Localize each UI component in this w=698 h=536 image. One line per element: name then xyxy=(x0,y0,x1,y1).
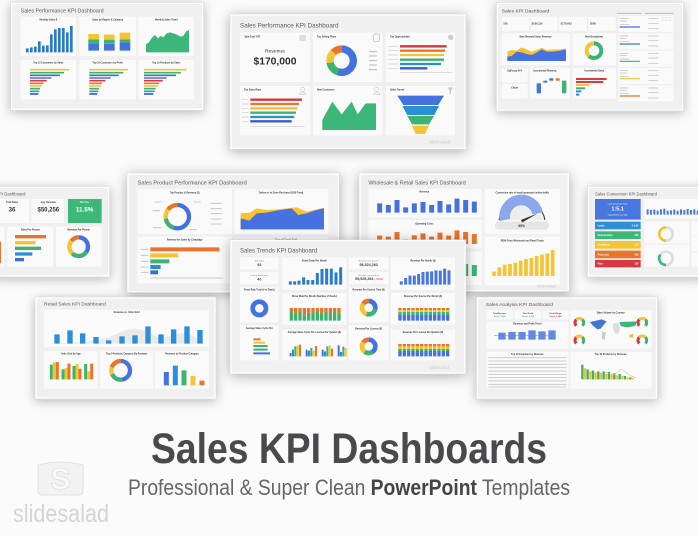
panel: Sales Performance KPI Dashboard (top left): Top 10 Customers by Profit xyxy=(93,62,123,65)
funnel strips: 250 xyxy=(634,245,639,247)
bar chart: leads xyxy=(648,209,698,215)
bar chart: green xyxy=(466,264,474,276)
logo: slidesalad xyxy=(13,462,109,528)
panel: Sales Trends KPI Dashboard xyxy=(230,240,466,374)
panel: Sales Trends KPI Dashboard: Revenue Per Source Total ($) xyxy=(353,289,385,292)
panel: Sales Product Performance KPI Dashboard: Top Product & Revenue ($) xyxy=(170,191,200,194)
gauge ring: yellow xyxy=(659,227,673,241)
funnel strips: Opportunities xyxy=(598,234,614,237)
panel: Sales Analysis KPI Dashboard xyxy=(476,297,658,399)
KPI: revenue: $50,256 xyxy=(38,207,60,213)
panel: Sales Performance KPI Dashboard (top centre): Top Sales Reps xyxy=(244,90,262,92)
panel: Sales Performance KPI Dashboard (top centre): Sales Funnel xyxy=(390,90,405,92)
bar chart: incremental sales xyxy=(576,79,607,95)
bar chart: operating costs xyxy=(380,230,474,244)
heading: slide title: Sales Performance KPI Dashboard xyxy=(240,22,339,29)
footer logo: slidesalad xyxy=(430,365,449,370)
donut chart: revenue per license xyxy=(362,340,375,353)
stacked bars: revenue per license per quarter xyxy=(400,344,448,356)
KPI numbers: 526 xyxy=(503,22,508,26)
panel: Sales KPI Dashboard (top right): OpExsay VoY xyxy=(507,71,523,73)
heading: slide title: Sales Performance KPI Dashboard xyxy=(21,8,104,14)
icon: person xyxy=(374,87,380,95)
KPI tiles: Profit Margin xyxy=(550,312,563,315)
icon: document xyxy=(374,34,379,41)
partial orange bar xyxy=(0,242,1,263)
bar chart: product category xyxy=(166,366,202,385)
panel: Sales Performance KPI Dashboard (top left): Monthly Sales $ xyxy=(40,19,58,22)
panel: Sales Analysis KPI Dashboard: Top 10 Countries by Revenue xyxy=(511,353,544,356)
grouped bars: units by age xyxy=(51,362,92,379)
bar chart: top customers xyxy=(30,70,69,94)
panel: Sales Trends KPI Dashboard: Average Sales Cycle Per xyxy=(246,327,273,330)
bar chart with line xyxy=(494,330,553,340)
panel: Sales KPI Dashboard (top right): Churn xyxy=(511,88,519,90)
panel: KPI Dashboard (left, cropped): Revenue Per Person xyxy=(67,229,91,231)
KPI tiles right: (-56%) xyxy=(374,277,383,281)
panel: Sales Analysis KPI Dashboard: Revenue and Profit Trend xyxy=(513,322,542,325)
stacked bar chart: sales by region xyxy=(94,42,125,51)
area chart: revenue xyxy=(507,47,566,61)
funnel strips xyxy=(595,222,641,267)
stacked bars: show rate per month xyxy=(291,308,339,321)
donut chart: revenue per source xyxy=(362,301,375,314)
funnel strips: 120 xyxy=(634,264,639,266)
KPI tiles left: 40 xyxy=(257,278,261,282)
KPI tiles: Total Profit xyxy=(523,312,533,315)
KPI numbers: $186,126 xyxy=(532,22,543,26)
panel: Sales KPI Dashboard (top right) xyxy=(496,2,684,111)
icon: filter xyxy=(448,87,453,94)
donut chart: show rate xyxy=(253,302,266,315)
funnel chart xyxy=(397,96,444,134)
panel: Retail Sales KPI Dashboard xyxy=(35,297,216,399)
donut chart: top products xyxy=(166,205,189,228)
panel: Sales Performance KPI Dashboard (top left): Monthly Sales Trend xyxy=(155,19,178,22)
bar chart: sales per person xyxy=(15,237,46,260)
waterfall chart xyxy=(537,78,566,93)
bar chart: revenue per month xyxy=(401,269,449,285)
KPI tiles: Total Revenue xyxy=(493,312,507,315)
logo wordmark: slidesalad xyxy=(13,500,109,528)
footer logo: slidesalad xyxy=(536,283,556,288)
bar chart: monthly sales xyxy=(27,26,71,52)
panel: Sales Product Performance KPI Dashboard xyxy=(127,173,339,293)
icon: S box: S xyxy=(50,463,71,496)
text: revenue KPI: Sale Goal YTD xyxy=(244,36,261,38)
KPI: total sales: Total Sales xyxy=(6,201,19,204)
panel: Retail Sales KPI Dashboard: Units Sold by Age xyxy=(61,353,81,356)
panel: Sales Performance KPI Dashboard (top centre): Top Opportunities xyxy=(390,35,411,38)
world map xyxy=(590,319,637,340)
panel: Sales Trends KPI Dashboard: Revenue Per Month ($) xyxy=(410,260,436,263)
heading: slide title: Retail Sales KPI Dashboard xyxy=(44,302,106,308)
heading: slide title: Sales Trends KPI Dashboard xyxy=(240,249,317,255)
KPI: conversion card: Opportunities per Sale xyxy=(608,213,628,216)
panel: Sales Trends KPI Dashboard: Revenue Per Source Per Month ($) xyxy=(404,295,442,298)
KPI numbers: $500 xyxy=(590,22,596,26)
KPI tiles right: Revenue Year To Date xyxy=(359,259,379,262)
funnel strips: Quotations xyxy=(598,244,611,247)
bar chart: sales reps xyxy=(250,100,302,121)
bar chart: top products xyxy=(144,70,187,94)
panel: Sales Product Performance KPI Dashboard: Cost of Goods Sold xyxy=(275,238,297,241)
panel: Wholesale & Retail Sales KPI Dashboard xyxy=(359,173,569,292)
grouped bars: sales cycle per quarter xyxy=(291,345,346,356)
gauge xyxy=(495,200,549,230)
bar chart: yellow growth xyxy=(494,250,553,276)
text: revenue KPI: Revenue xyxy=(265,49,285,55)
donut chart: revenue per person xyxy=(69,237,88,256)
panel: Sales Conversion KPI Dashboard (right, cropped) xyxy=(587,186,698,277)
KPI tiles: Score: 1.24% xyxy=(549,315,562,318)
right column rep bars xyxy=(620,27,640,96)
panel: Sales Trends KPI Dashboard: Show Rate Per Month (Number of Deals) xyxy=(292,295,337,298)
panel: Sales Trends KPI Dashboard: Average Sales Cycle Per License Per Quarter ($) xyxy=(288,331,341,334)
KPI: conversion card: 1:5.1 xyxy=(612,207,624,213)
donut chart: breakdown xyxy=(587,43,601,58)
icon: card xyxy=(299,35,306,41)
KPI tiles right: 98,524,263 xyxy=(359,263,378,267)
panel: Sales Trends KPI Dashboard: Revenue Per License ($) xyxy=(355,328,382,330)
KPI: revenue: Avg. Revenue xyxy=(41,201,57,204)
KPI: conversion card xyxy=(595,199,641,220)
KPI: total sales: 36 xyxy=(8,206,16,213)
heading: slide title: Sales Analysis KPI Dashboard xyxy=(486,302,553,308)
panel: Sales Trends KPI Dashboard: Revenue Per License Per Quarter ($) xyxy=(403,331,443,334)
KPI tiles: Score: 1,356 xyxy=(494,315,506,318)
KPI tiles right: Revenue Last month vs xyxy=(358,274,379,277)
panel: Sales KPI Dashboard (top right): Incremental Sales xyxy=(584,70,605,73)
funnel strips: Leads xyxy=(598,225,605,227)
stacked bars: revenue per source per month xyxy=(400,308,448,321)
heading: slide title: Sales KPI Dashboard xyxy=(502,8,550,14)
panel: Sales Trends KPI Dashboard: Show Deals Per Month xyxy=(302,260,327,263)
panel: Sales KPI Dashboard (top right): Rest Breakdown xyxy=(585,35,604,38)
panel: Sales KPI Dashboard (top right): New Renewal Sales Revenue xyxy=(520,36,552,38)
KPI tiles xyxy=(493,312,563,318)
KPI: green card: Win Rate xyxy=(80,201,90,204)
heading: slide title: Sales Conversion KPI Dashboard xyxy=(595,191,658,196)
gauges xyxy=(573,317,648,346)
panel: Sales Product Performance KPI Dashboard: Revenue for Sales by Campaign xyxy=(167,239,203,241)
icon: person xyxy=(300,87,306,95)
bar chart: revenue xyxy=(380,199,474,213)
panel: Wholesale & Retail Sales KPI Dashboard: ROM From Wholesale and Retail Totals xyxy=(501,239,545,242)
funnel strips: Wins xyxy=(598,264,604,266)
text: revenue KPI: $170,000 xyxy=(253,56,297,67)
area chart: new customers xyxy=(322,102,376,130)
panel: Sales Analysis KPI Dashboard: Top 10 Products by Revenue xyxy=(595,353,627,356)
area chart: monthly trend xyxy=(146,30,189,52)
bar chart: deals per month xyxy=(290,267,341,285)
panel: Sales Performance KPI Dashboard (top centre) xyxy=(230,14,466,149)
title: Sales KPI Dashboards xyxy=(151,425,547,473)
grouped bars with line xyxy=(582,365,636,379)
panel: Retail Sales KPI Dashboard: Top 5 Products Category By Revenue xyxy=(106,353,148,356)
panel: Sales Performance KPI Dashboard (top centre): New Customers xyxy=(317,89,335,92)
gauge ring: green xyxy=(659,252,673,265)
funnel strips: 500 xyxy=(634,235,639,237)
KPI tiles left: Total Sales xyxy=(254,259,264,262)
panel: Sales Performance KPI Dashboard (top left): Top 10 Products by Sales xyxy=(152,62,181,65)
bar chart: opportunities xyxy=(400,46,447,68)
footer logo: slidesalad xyxy=(430,139,451,144)
subtitle: Professional & Super Clean PowerPoint Templates xyxy=(128,475,570,500)
panel: Sales Performance KPI Dashboard (top centre): Top Selling Plans xyxy=(317,36,337,38)
panel: Sales KPI Dashboard (top right): Incremental Revenue xyxy=(533,70,557,73)
panel: Sales Analysis KPI Dashboard: Sales Volume by Country xyxy=(597,312,625,315)
legend: plans xyxy=(369,52,377,70)
panel: Sales Performance KPI Dashboard (top left): Top 10 Customers by Sales xyxy=(33,62,64,65)
legend xyxy=(617,12,673,15)
KPI: green card xyxy=(68,199,102,223)
panel: Sales Performance KPI Dashboard (top left): Sales by Region & Category xyxy=(92,19,124,22)
panel: Wholesale & Retail Sales KPI Dashboard: Conversion rate of email generated online traffic xyxy=(496,191,550,194)
funnel strips: Proposals xyxy=(598,254,610,256)
bar chart: sales cycle xyxy=(253,339,270,353)
panel: Retail Sales KPI Dashboard: Revenue by Product Category xyxy=(165,353,199,356)
KPI: green card: 11.5% xyxy=(76,206,94,213)
panel: Retail Sales KPI Dashboard: Revenue vs. Units Sold xyxy=(114,311,140,314)
bar chart: top customers by profit xyxy=(89,70,128,94)
data table xyxy=(488,358,567,387)
panel: Sales Trends KPI Dashboard: Show Rate Total (# of Deals) xyxy=(244,289,275,292)
KPI tiles right: 98,525,263 xyxy=(355,277,373,281)
panel: Sales Performance KPI Dashboard (top left) xyxy=(11,2,204,110)
heading: slide title: Sales Product Performance KPI Dashboard xyxy=(138,181,247,187)
panel: KPI Dashboard (left, cropped): Sales Per Person xyxy=(21,229,40,231)
funnel strips: 180 xyxy=(634,254,639,256)
area chart: online vs store xyxy=(241,207,324,229)
bar chart: campaigns xyxy=(150,249,219,272)
panel: Wholesale & Retail Sales KPI Dashboard: Revenue xyxy=(419,191,430,193)
KPI tiles: Score: 3,211 xyxy=(522,315,535,318)
KPI numbers: $175,602 xyxy=(561,22,572,26)
KPI numbers xyxy=(503,22,596,26)
panel: Sales Product Performance KPI Dashboard: Online vs In Store Purchase (2020 Total) xyxy=(259,191,303,194)
panel: Wholesale & Retail Sales KPI Dashboard: Operating Costs xyxy=(415,222,434,225)
donut chart: top 5 products xyxy=(111,361,130,380)
funnel strips: 5:1.80 xyxy=(632,225,639,227)
text: revenue KPI xyxy=(244,36,297,67)
donut chart: selling plans xyxy=(330,49,353,72)
KPI tiles left: Deals in the Pipeline xyxy=(250,274,269,277)
legend: products xyxy=(153,202,222,230)
KPI: revenue xyxy=(38,201,60,213)
KPI tiles left: 93 xyxy=(257,263,261,267)
gauge: 85% xyxy=(518,224,525,228)
icon: bulb xyxy=(448,35,453,40)
heading: slide title: Wholesale & Retail Sales KPI Dashboard xyxy=(368,180,466,186)
KPI tiles right xyxy=(355,259,383,281)
panel: KPI Dashboard (left, cropped) xyxy=(0,186,110,277)
area + bar chart: revenue vs units xyxy=(50,326,205,344)
KPI: total sales xyxy=(6,201,19,213)
KPI tiles left xyxy=(250,259,269,282)
KPI: conversion card: Lead Conversion Rate xyxy=(608,203,628,206)
